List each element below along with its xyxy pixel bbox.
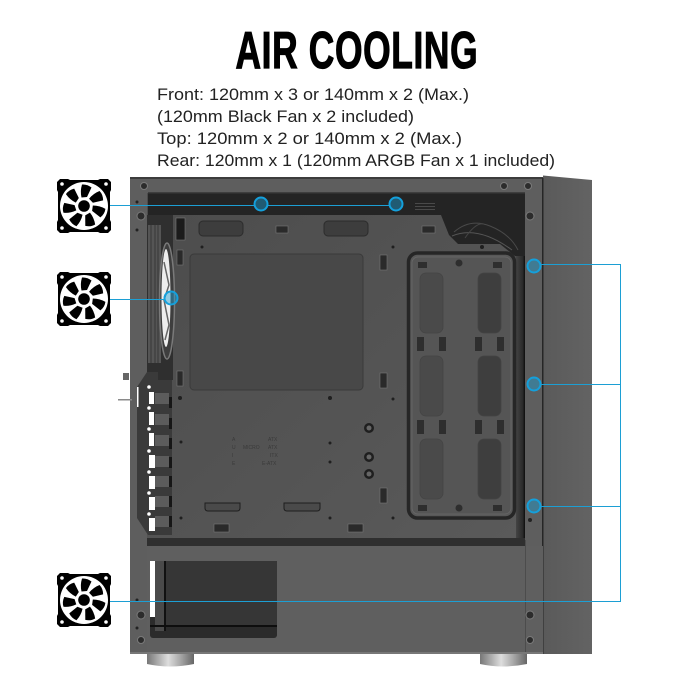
board size markings: U bbox=[232, 445, 236, 451]
left fan bbox=[147, 215, 174, 380]
front panel bbox=[543, 176, 592, 654]
PCI slots bbox=[118, 372, 172, 535]
PSU shroud bbox=[147, 538, 543, 652]
case frame bbox=[130, 178, 543, 654]
board size markings: E-ATX bbox=[262, 461, 277, 467]
top rail bbox=[148, 192, 525, 194]
CPU cutout bbox=[190, 254, 363, 390]
clips and small slots bbox=[176, 218, 435, 532]
board size markings bbox=[232, 437, 278, 467]
PC case bbox=[118, 176, 592, 666]
board size markings: A bbox=[232, 437, 236, 443]
board size markings: ATX bbox=[268, 445, 278, 451]
standoffs and holes bbox=[178, 245, 484, 520]
board size markings: I bbox=[232, 453, 233, 459]
callout dots bbox=[164, 198, 540, 512]
specification text bbox=[157, 85, 555, 170]
case feet bbox=[147, 654, 527, 666]
top cutouts bbox=[199, 221, 368, 236]
board size markings: MICRO bbox=[243, 445, 260, 451]
title: AIR COOLING bbox=[236, 22, 478, 80]
motherboard tray bbox=[147, 193, 525, 543]
board size markings: ITX bbox=[270, 453, 278, 459]
callout lines bbox=[110, 206, 620, 602]
specification text: Front: 120mm x 3 or 140mm x 2 (Max.) bbox=[157, 85, 469, 104]
specification text: (120mm Black Fan x 2 included) bbox=[157, 107, 414, 126]
right gutter bbox=[516, 256, 525, 542]
cable routing slots bbox=[205, 503, 320, 511]
rim holes bbox=[136, 200, 532, 630]
drive cage bbox=[408, 253, 514, 518]
fan icons bbox=[57, 179, 111, 627]
specification text: Rear: 120mm x 1 (120mm ARGB Fan x 1 included) bbox=[157, 151, 555, 170]
board size markings: ATX bbox=[268, 437, 278, 443]
specification text: Top: 120mm x 2 or 140mm x 2 (Max.) bbox=[157, 129, 462, 148]
top vent bbox=[148, 193, 525, 258]
case screws bbox=[137, 182, 534, 644]
board size markings: E bbox=[232, 461, 236, 467]
